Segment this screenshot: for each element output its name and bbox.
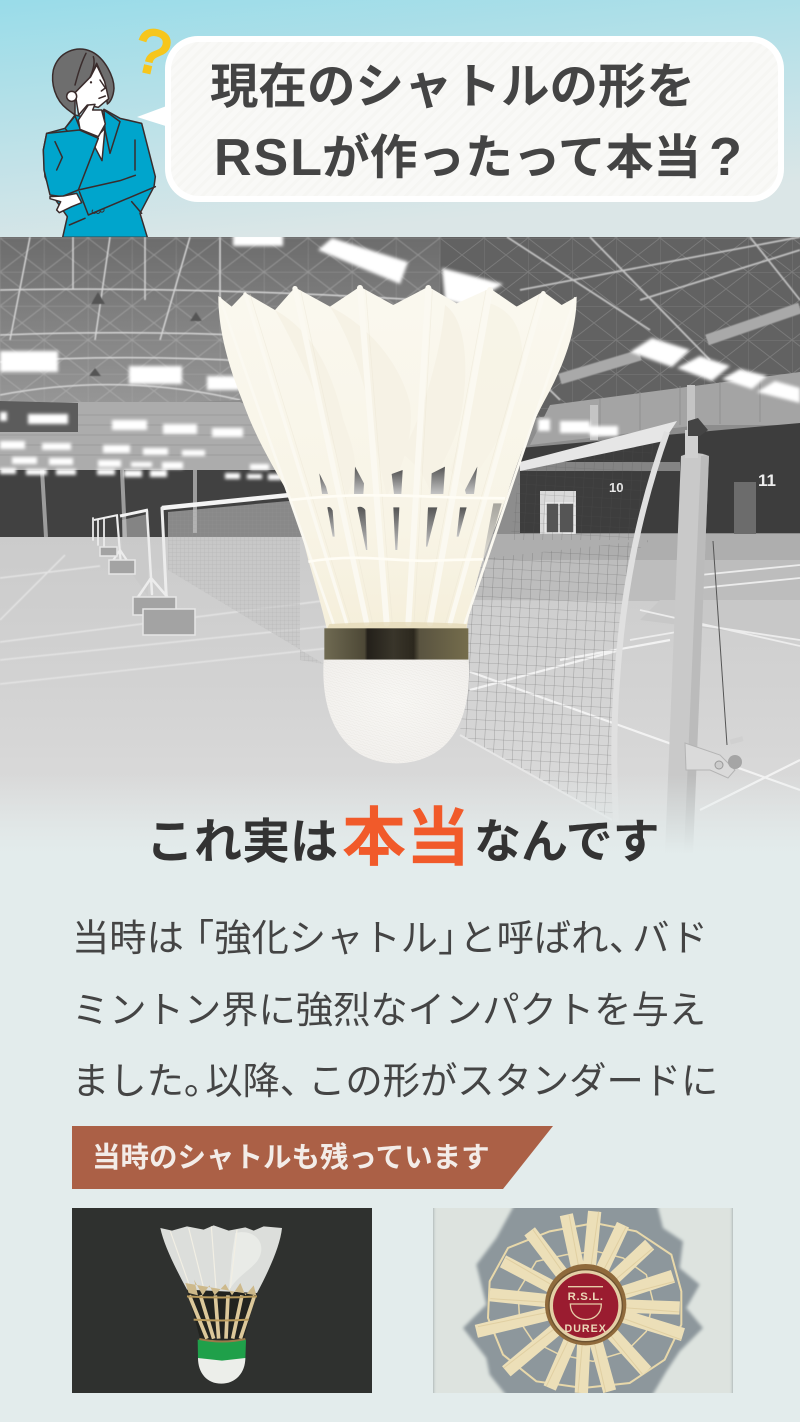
hair [53,49,114,115]
right roof [440,237,800,420]
vintage feathers [160,1225,282,1293]
left net bases [100,547,195,635]
vintage cork [198,1358,245,1384]
photo: vintage shuttlecock [72,1208,372,1393]
main net [460,421,677,822]
heading question: RSL [214,129,324,187]
dark rear wall [0,470,300,537]
left wall [0,402,280,470]
gaps between feathers [319,467,502,557]
left roof [0,237,544,419]
blazer [43,109,155,237]
vintage band [198,1340,246,1361]
heading answer: 本当 [342,787,470,879]
court numbers [610,474,776,492]
lower hand [50,193,82,213]
vintage wood skirt [189,1295,255,1339]
heading question [210,47,742,188]
lapels [65,110,120,153]
red cap: DUREX [565,1323,607,1335]
heading question: 現在のシャトルの形を [210,47,695,117]
left floor lines [0,555,340,684]
shirt [95,128,105,161]
right floor [470,534,800,602]
corner feathers [433,1201,733,1400]
base stain [327,622,467,629]
photo: RSL cork interior [433,1201,733,1400]
red cap [545,1264,626,1345]
feather skirt [218,287,577,628]
heading question: ? [709,127,742,187]
court numbers: 11 [758,471,776,490]
far lights glow [0,234,800,480]
floor [0,537,800,853]
vintage feather teeth [185,1280,256,1295]
skirt strings [290,495,505,562]
body text: ミントン界に強烈なインパクトを与え [72,980,706,1034]
left nets [94,494,324,664]
body text [72,908,718,1105]
dark right wall [520,423,800,533]
left net posts [92,506,168,596]
heading answer: なんです [474,803,660,872]
heading answer: これ実は [146,802,338,872]
spokes [476,1211,683,1393]
vintage gaps [187,1290,257,1340]
court numbers: 10 [609,480,623,495]
photo fade [0,786,800,853]
spoke strings [488,1223,681,1388]
hall backdrop [194,400,800,537]
shaft shadows [250,290,539,623]
body text: ました。以降、この形がスタンダードに [72,1051,718,1105]
heading question: が作ったって本当 [322,119,701,188]
body text: 当時は「強化シャトル」と呼ばれ、バド [72,908,708,962]
cork base [323,660,469,763]
hero photo: badminton hall [0,234,800,854]
face [75,65,109,115]
raised arm [43,130,98,197]
shafts [220,288,575,623]
net post [665,418,744,853]
cork band [324,628,468,660]
raised hand [78,104,105,137]
subheading ribbon [72,1126,553,1189]
vanes [275,303,522,497]
speech bubble [137,36,784,202]
subheading ribbon: 当時のシャトルも残っています [92,1135,490,1176]
door [540,491,576,535]
icon: question mark: ? [128,15,177,90]
right wall band [530,372,800,445]
spoke edges [478,1211,681,1393]
icon: hero shuttlecock [218,287,577,763]
header band [0,0,800,237]
icon: thinking person [43,49,155,237]
red cap: R.S.L. [568,1291,604,1303]
